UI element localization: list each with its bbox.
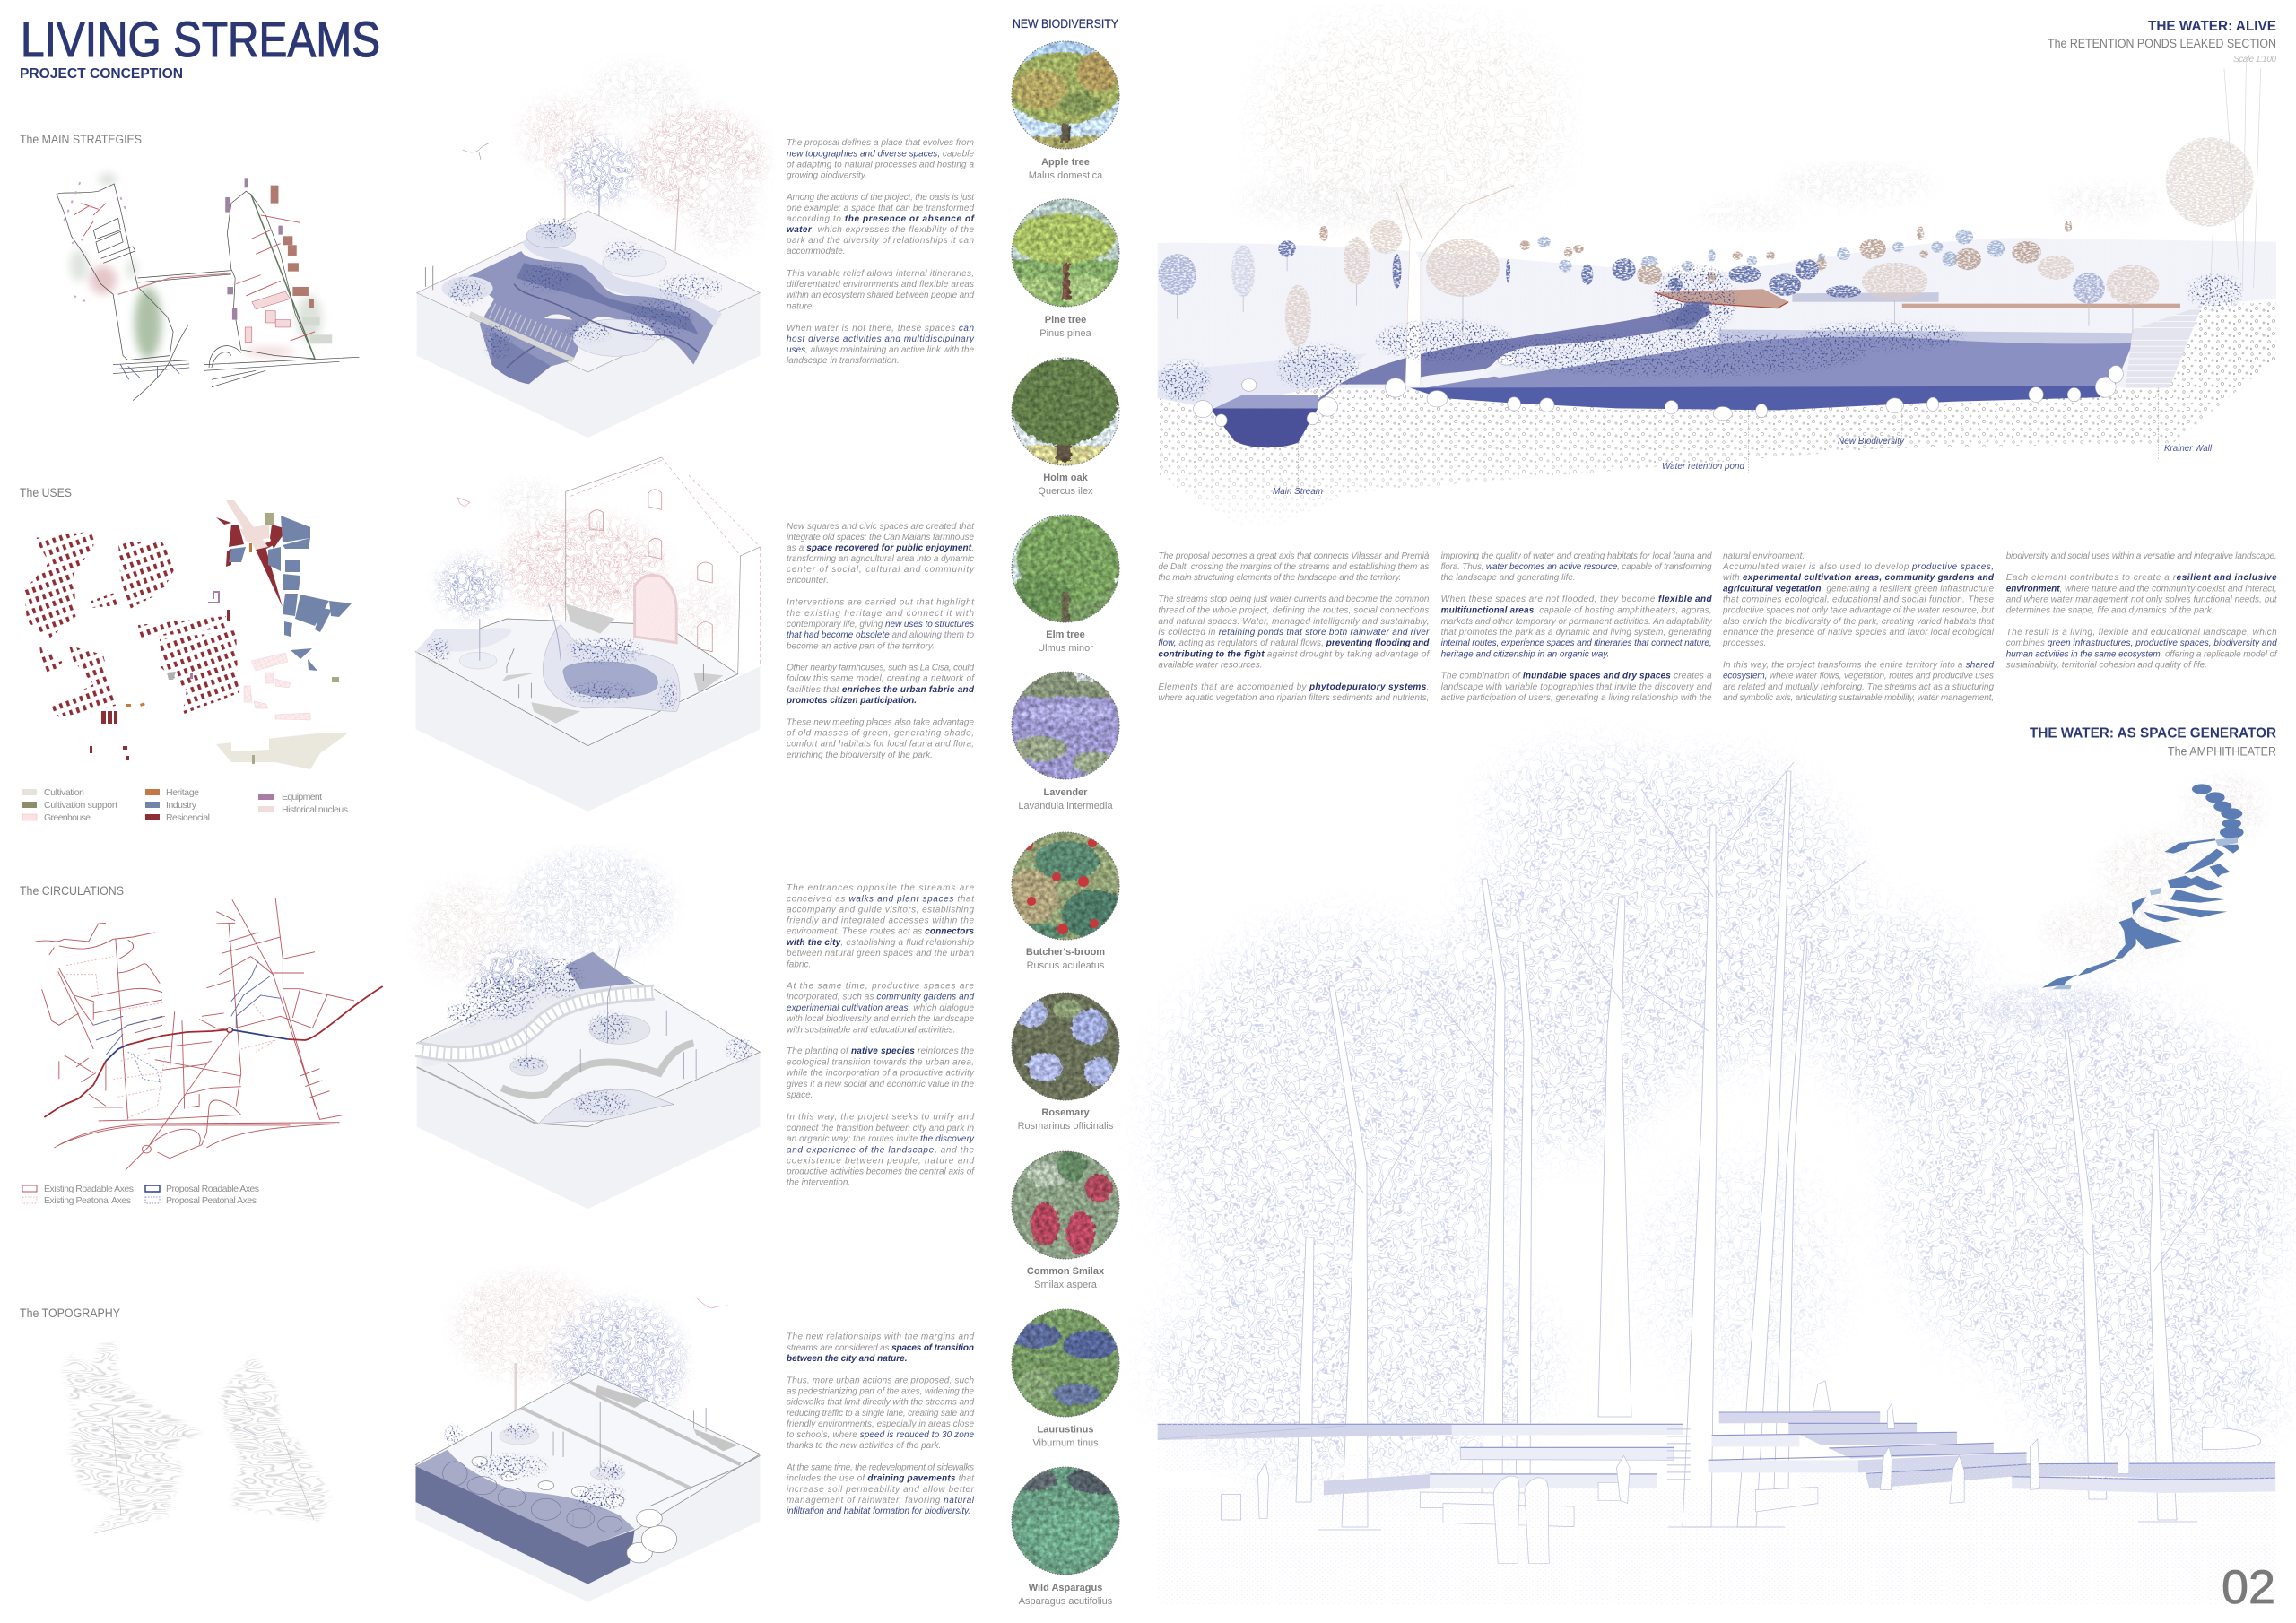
text: water alive description: The streams stop being just water currents and become the common — [1158, 595, 1430, 604]
legend: uses: Cultivation support — [44, 800, 117, 811]
benches — [1158, 1381, 2275, 1563]
heading: the water alive: The RETENTION PONDS LEAKED SECTION — [2048, 37, 2276, 50]
text: paved walk description: an organic way; the routes invite the discovery — [787, 1134, 975, 1144]
heading: topography: The TOPOGRAPHY — [20, 1306, 120, 1320]
species: apple tree: Malus domestica — [1029, 170, 1103, 181]
text: paved walk description: and experience of the landscape, and the — [787, 1145, 974, 1155]
text: street description: reducing traffic to a single lane, creating safe and — [787, 1409, 974, 1419]
text: street description: Thus, more urban actions are proposed, such — [787, 1376, 974, 1386]
legend: uses: Greenhouse — [44, 812, 91, 823]
text: oasis description: accommodate. — [787, 247, 846, 256]
text: water alive description: The result is a living, flexible and educational landscape, which — [2006, 628, 2277, 638]
species: wild asparagus: Wild Asparagus — [1029, 1583, 1102, 1593]
text: paved walk description: coexistence between people, nature and — [787, 1157, 974, 1167]
bird — [697, 1298, 728, 1308]
text: water alive description: also enrich the biodiversity of the park, creating varied habitats that — [1723, 617, 1995, 627]
text: street description: includes the use of draining pavements that — [787, 1474, 975, 1484]
text: water alive description: processes. — [1722, 638, 1766, 648]
text: oasis description: nature. — [787, 301, 814, 311]
text: farmhouse description: integrate old spaces: the Can Maians farmhouse — [787, 533, 974, 542]
heading: the water as space generator: The AMPHITHEATER — [2168, 745, 2276, 759]
text: street description: between the city and nature. — [787, 1354, 907, 1364]
text: water alive description: determines the shape, life and dynamics of the park. — [2006, 606, 2213, 615]
text: oasis description: host diverse activities and multidisciplinary — [787, 334, 975, 344]
heading: the water alive: THE WATER: ALIVE — [2148, 19, 2276, 34]
heading: main strategies: The MAIN STRATEGIES — [20, 133, 142, 146]
text: paved walk description: the intervention. — [787, 1178, 850, 1188]
text: water alive description: thread of the whole project, defining the routes, social connections — [1158, 606, 1429, 615]
text: paved walk description: incorporated, such as community gardens and — [787, 992, 974, 1002]
text: water alive description: internal routes, experience spaces and itineraries that connect nature, — [1441, 638, 1712, 648]
text: water alive description: environment, where nature and the community coexist and interact, — [2006, 585, 2277, 594]
text: oasis description: of adapting to natural processes and hosting a — [787, 160, 974, 169]
legend: circulations: Existing Roadable Axes — [44, 1184, 134, 1194]
text: farmhouse description: transforming an agricultural area into a dynamic — [787, 554, 974, 564]
heading: new biodiversity: NEW BIODIVERSITY — [1013, 17, 1118, 30]
text: oasis description — [786, 138, 976, 366]
text: paved walk description: gives it a new social and economic value in the — [787, 1080, 974, 1089]
text: street description: infiltration and habitat formation for biodiversity. — [787, 1506, 970, 1516]
text: water alive description: In this way, the project transforms the entire territory into a shared — [1723, 660, 1994, 671]
species: apple tree — [1012, 41, 1119, 178]
text: paved walk description: accompany and guide visitors, establishing — [787, 906, 974, 916]
species: rosemary: Rosmarinus officinalis — [1018, 1121, 1114, 1132]
text: water alive description: contributing to the fight against drought by taking advantage of — [1158, 649, 1431, 660]
axonometric: oasis — [417, 63, 764, 438]
text: water alive description: sustainability, territorial cohesion and quality of life. — [2006, 660, 2207, 671]
text: farmhouse description: the existing heritage and connect it with — [787, 609, 974, 619]
text: water alive description: When these spaces are not flooded, they become flexible and — [1441, 595, 1712, 604]
text: water alive description: is collected in retaining ponds that store both rainwater and river — [1158, 628, 1430, 638]
text: oasis description: uses, always maintaining an active link with the — [787, 345, 974, 355]
text: paved walk description: The entrances opposite the streams are — [787, 883, 974, 893]
text: paved walk description: At the same time, productive spaces are — [786, 981, 974, 991]
text: farmhouse description: enriching the biodiversity of the park. — [787, 751, 933, 760]
text: water alive description: human activities in the same ecosystem, offering a replicable model of — [2006, 649, 2278, 660]
bird — [463, 143, 492, 160]
text: street description: management of rainwater, favoring natural — [787, 1496, 975, 1506]
legend: circulations: Proposal Peatonal Axes — [166, 1195, 257, 1206]
water plants — [1159, 265, 2242, 401]
text: paved walk description: productive activities becomes the central axis of — [786, 1167, 975, 1176]
species: pine tree — [1012, 199, 1119, 339]
text: paved walk description: with local biodiversity and enrich the landscape — [787, 1014, 974, 1024]
text: water alive description: improving the quality of water and creating habitats for local fauna and — [1441, 551, 1712, 561]
heading: the water as space generator — [2030, 726, 2276, 759]
big tree canopy and haze — [1254, 15, 1568, 227]
text: farmhouse description: These new meeting places also take advantage — [787, 718, 974, 728]
text: paved walk description: The planting of native species reinforces the — [787, 1046, 974, 1056]
text: oasis description: When water is not there, these spaces can — [787, 324, 974, 334]
text: water alive description: that combines ecological, educational and social function. These — [1723, 595, 1994, 604]
text: oasis description: landscape in transformation. — [787, 356, 900, 366]
text: water alive description: The combination of inundable spaces and dry spaces creates a — [1441, 671, 1712, 681]
title — [20, 11, 380, 82]
text: water alive description: are related and mutually reinforcing. The streams act as a structuring — [1723, 682, 1994, 692]
text: paved walk description: In this way, the project seeks to unify and — [787, 1113, 974, 1123]
text: street description — [786, 1332, 975, 1516]
species: wild asparagus — [1000, 1457, 1139, 1607]
labels: Main Stream — [1273, 486, 1323, 497]
labels: Krainer Wall — [2164, 443, 2213, 454]
legend: circulations: Proposal Roadable Axes — [166, 1184, 259, 1194]
text: water alive description — [1158, 551, 2278, 703]
text: oasis description: The proposal defines a place that evolves from — [787, 138, 974, 148]
labels: New Biodiversity — [1838, 436, 1905, 447]
text: oasis description: according to the presence or absence of — [787, 214, 976, 224]
text: street description: thanks to the new activities of the park. — [787, 1441, 941, 1451]
text: paved walk description: conceived as walks and plant spaces that — [787, 894, 975, 904]
amphitheater drawing — [1157, 753, 2287, 1605]
legend: circulations: Existing Peatonal Axes — [44, 1195, 131, 1206]
heading: the water as space generator: THE WATER: AS SPACE GENERATOR — [2030, 726, 2276, 742]
text: water alive description: agricultural vegetation, generating a resilient green infrastructure — [1723, 585, 1994, 594]
text: farmhouse description: as a space recovered for public enjoyment, — [787, 543, 974, 553]
species: rosemary: Rosemary — [1041, 1107, 1090, 1118]
text: street description: increase soil permeability and allow better — [787, 1485, 975, 1495]
text: farmhouse description: New squares and civic spaces are created that — [787, 522, 975, 532]
species: laurustinus — [1000, 1300, 1131, 1448]
legend: uses: Residencial — [166, 812, 210, 823]
species: pine tree: Pinus pinea — [1039, 328, 1092, 339]
text: paved walk description: connect the transition between city and park in — [787, 1124, 974, 1133]
title: LIVING STREAMS — [21, 11, 380, 67]
map: circulations — [35, 898, 383, 1170]
text: oasis description: within an ecosystem shared between people and — [787, 291, 974, 300]
text: oasis description: new topographies and diverse spaces, capable — [787, 149, 974, 159]
text: paved walk description: experimental cultivation areas, which dialogue — [787, 1003, 974, 1013]
text: farmhouse description: promotes citizen participation. — [786, 696, 917, 706]
text: water alive description: The proposal becomes a great axis that connects Vilassar and Premià — [1158, 551, 1430, 561]
text: farmhouse description: center of social, cultural and community — [787, 565, 975, 575]
text: farmhouse description: Interventions are carried out that highlight — [787, 598, 975, 608]
text: street description: friendly environments, especially in areas close — [787, 1419, 974, 1429]
heading: the water alive — [2048, 19, 2276, 65]
text: farmhouse description: become an active part of the territory. — [787, 641, 935, 651]
text: farmhouse description: Other nearby farmhouses, such as La Cisa, could — [787, 664, 974, 673]
species: butcher's-broom: Butcher's-broom — [1026, 947, 1105, 958]
axonometric: paved walk — [417, 852, 760, 1209]
title: PROJECT CONCEPTION — [20, 66, 183, 82]
species: holm oak — [1012, 357, 1119, 497]
heading: circulations: The CIRCULATIONS — [20, 884, 124, 898]
text: water alive description: enhance the presence of native species and favor local ecological — [1723, 628, 1995, 638]
trees — [520, 63, 764, 251]
text: oasis description: This variable relief allows internal itineraries, — [787, 269, 974, 279]
species: holm oak: Quercus ilex — [1038, 486, 1093, 497]
species: butcher's-broom — [1000, 820, 1131, 971]
text: oasis description: growing biodiversity. — [787, 170, 867, 180]
species: common smilax: Smilax aspera — [1034, 1280, 1098, 1290]
legend: uses: Historical nucleus — [282, 804, 348, 815]
text: oasis description: differentiated environments and flexible areas — [787, 280, 974, 290]
text: water alive description: de Dalt, crossing the margins of the streams and establishing them as — [1158, 562, 1429, 572]
key map: amphitheater stream — [1973, 776, 2265, 1031]
text: water alive description: that promotes the park as a dynamic and living system, generating — [1441, 628, 1712, 638]
text: street description: as pedestrianizing part of the axes, widening the — [787, 1386, 974, 1396]
species: elm tree — [1000, 506, 1131, 654]
text: water alive description: biodiversity and social uses within a versatile and integrative landscape. — [2006, 551, 2277, 561]
text: paved walk description: between natural green spaces and the urban — [787, 949, 974, 959]
text: water alive description: and natural spaces. Water, managed intelligently and sustainably, — [1158, 617, 1429, 627]
text: oasis description: Among the actions of the project, the oasis is just — [786, 193, 975, 203]
text: paved walk description: fabric. — [787, 959, 811, 969]
text: water alive description: heritage and citizenship in an organic way. — [1441, 649, 1609, 660]
text: water alive description: Each element contributes to create a resilient and inclusive — [2006, 573, 2277, 583]
text: water alive description: flora. Thus, water becomes an active resource, capable of transforming — [1441, 562, 1712, 572]
soil — [1158, 302, 2276, 538]
species: butcher's-broom: Ruscus aculeatus — [1027, 960, 1105, 971]
text: water alive description: natural environment. — [1723, 551, 1805, 561]
text: farmhouse description: facilities that enriches the urban fabric and — [787, 685, 975, 695]
text: farmhouse description: follow this same model, creating a network of — [787, 674, 975, 683]
legend: uses: Equipment — [282, 792, 322, 803]
text: water alive description: landscape with variable topographies that invite the discovery and — [1441, 682, 1712, 692]
text: street description: to schools, where speed is reduced to 30 zone — [787, 1430, 974, 1440]
species: lavender — [1000, 662, 1131, 812]
text: water alive description: where aquatic vegetation and riparian filters sediments and nutrients, — [1158, 693, 1429, 703]
species: common smilax: Common Smilax — [1027, 1266, 1105, 1277]
text: paved walk description — [786, 883, 975, 1188]
text: paved walk description: space. — [787, 1090, 813, 1100]
text: water alive description: and where water management not only solves functional needs, but — [2006, 595, 2278, 604]
text: street description: sidewalks that limit directly with the streams and — [787, 1398, 974, 1408]
text: oasis description: park and the diversity of relationships it can — [786, 236, 974, 246]
text: water alive description: active participation of users, generating a living relationship with the — [1441, 693, 1712, 703]
text: water alive description: productive spaces not only take advantage of the water resource, but — [1722, 606, 1995, 615]
labels — [1273, 436, 2213, 497]
labels: Water retention pond — [1662, 461, 1745, 472]
species: wild asparagus: Asparagus acutifolius — [1019, 1596, 1113, 1607]
text: water alive description: ecosystem, where water flows, vegetation, routes and productive uses — [1723, 671, 1994, 681]
map: main strategies — [57, 174, 359, 401]
map: topography — [62, 1342, 330, 1533]
trunks — [1296, 771, 2177, 1527]
species: laurustinus: Laurustinus — [1038, 1425, 1093, 1436]
text: farmhouse description: contemporary life, giving new uses to structures — [787, 620, 974, 629]
text: street description: The new relationships with the margins and — [787, 1332, 974, 1342]
text: water alive description: and symbolic axis, articulating sustainable mobility, water management, — [1723, 693, 1994, 703]
text: street description: streams are considered as spaces of transition — [787, 1343, 974, 1353]
text: street description: At the same time, the redevelopment of sidewalks — [786, 1463, 974, 1472]
text: farmhouse description: comfort and habitats for local fauna and flora, — [787, 740, 974, 750]
species: common smilax — [1000, 1141, 1131, 1290]
species: lavender: Lavender — [1044, 787, 1088, 798]
heading: the water alive: Scale 1:100 — [2233, 55, 2276, 65]
text: paved walk description: while the incorporation of a productive activity — [787, 1069, 975, 1079]
legend: uses: Cultivation — [44, 787, 84, 798]
text: water alive description: combines green infrastructures, productive spaces, biodiversity and — [2006, 638, 2277, 648]
species: holm oak: Holm oak — [1043, 473, 1089, 483]
text: water alive description: with experimental cultivation areas, community gardens and — [1723, 573, 1995, 583]
species: pine tree: Pine tree — [1045, 315, 1086, 325]
text: paved walk description: environment. These routes act as connectors — [787, 927, 974, 937]
axonometric: street and stream — [415, 1273, 760, 1602]
ground stipple — [1158, 1488, 2276, 1605]
text: water alive description: the landscape and generating life. — [1441, 573, 1576, 583]
text: farmhouse description: that had become obsolete and allowing them to — [787, 630, 974, 640]
text: paved walk description: with sustainable and educational activities. — [787, 1025, 955, 1035]
map: uses — [24, 500, 352, 769]
text: water alive description: Accumulated water is also used to develop productive spaces, — [1722, 562, 1994, 572]
species: elm tree: Elm tree — [1046, 629, 1085, 640]
legend: uses — [22, 787, 348, 823]
section drawing: retention ponds — [1158, 15, 2276, 538]
species: elm tree: Ulmus minor — [1038, 643, 1093, 654]
text: farmhouse description — [786, 522, 975, 760]
text: paved walk description: with the city, establishing a fluid relationship — [787, 938, 974, 948]
text: farmhouse description: of old masses of green, generating shade, — [787, 729, 974, 739]
heading: uses: The USES — [20, 486, 72, 499]
legend: circulations — [22, 1184, 259, 1206]
text: water alive description: the main structuring elements of the landscape and the territory. — [1158, 573, 1401, 583]
plants — [448, 218, 722, 359]
text: water alive description: multifunctional areas, capable of hosting amphitheaters, agoras, — [1441, 606, 1712, 615]
axonometric: farmhouse — [415, 457, 760, 812]
legend: uses: Heritage — [166, 787, 199, 798]
text: water alive description: flow, acting as regulators of natural flows, preventing flooding and — [1158, 638, 1430, 648]
legend: uses: Industry — [166, 800, 197, 811]
text: water alive description: markets and other temporary or permanent activities. An adaptability — [1441, 617, 1713, 627]
species: lavender: Lavandula intermedia — [1018, 801, 1113, 812]
species: apple tree: Apple tree — [1041, 157, 1090, 168]
species: rosemary — [1000, 982, 1131, 1132]
text: water alive description: available water resources. — [1158, 660, 1263, 671]
text: water alive description: Elements that are accompanied by phytodepuratory systems, — [1158, 682, 1429, 692]
text: paved walk description: friendly and integrated accesses within the — [787, 916, 974, 925]
tree canopies — [1157, 753, 2287, 1480]
text: farmhouse description: encounter. — [787, 576, 829, 586]
page number: 02 — [2222, 1561, 2275, 1614]
text: paved walk description: ecological transition towards the urban area, — [787, 1058, 974, 1067]
species: laurustinus: Viburnum tinus — [1032, 1437, 1099, 1448]
text: oasis description: water, which expresses the flexibility of the — [787, 225, 974, 235]
text: oasis description: one example: a space that can be transformed — [787, 204, 974, 213]
